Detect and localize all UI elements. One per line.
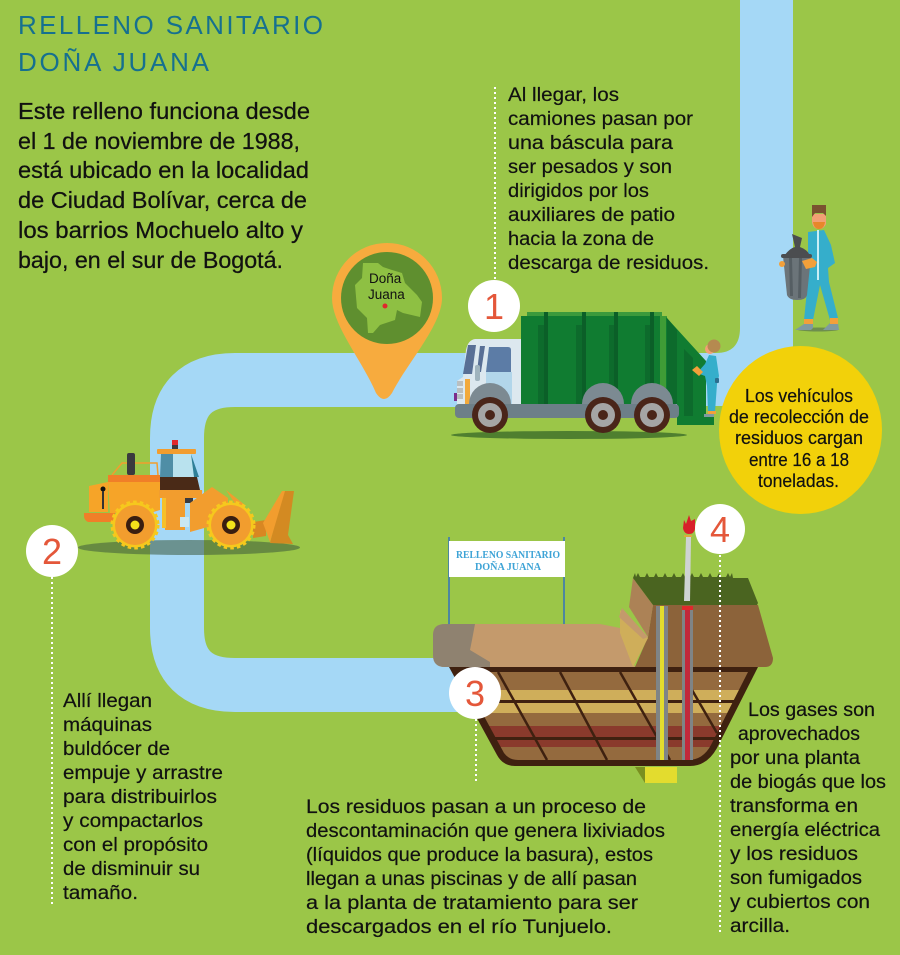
intro text: Este relleno funciona desde (18, 98, 310, 124)
landfill sign: RELLENO SANITARIO (456, 550, 560, 561)
garbage truck (451, 312, 714, 439)
step 4 text (730, 699, 886, 937)
worker with trash can (779, 205, 839, 332)
callout: truck capacity: residuos cargan (735, 427, 863, 448)
bulldozer (78, 440, 300, 555)
step 4 text: de biogás que los (730, 771, 886, 793)
title: DOÑA JUANA (18, 47, 210, 77)
step 3 text: a la planta de tratamiento para ser (306, 892, 639, 914)
step 2 text: máquinas (63, 714, 152, 736)
title (18, 10, 323, 77)
step 3 marker (449, 667, 501, 783)
step 4 text: por una planta (730, 747, 860, 769)
river path (177, 0, 793, 685)
step 3 text: descontaminación que genera lixiviados (306, 820, 665, 842)
truck worker (692, 340, 720, 417)
step 1 text: ser pesados y son (508, 156, 672, 178)
step 2 marker (26, 525, 78, 905)
intro text: está ubicado en la localidad (18, 157, 309, 183)
callout: truck capacity: de recolección de (729, 406, 869, 427)
step 1 text: hacia la zona de (508, 228, 654, 250)
step 1 text: Al llegar, los (508, 84, 619, 106)
step 4 marker (695, 504, 745, 935)
intro text: de Ciudad Bolívar, cerca de (18, 187, 307, 213)
step 4 text: energía eléctrica (730, 819, 880, 841)
step 4 text: aprovechados (738, 723, 860, 745)
step 2 text: tamaño. (63, 882, 138, 904)
step 3 text: descargados en el río Tunjuelo. (306, 916, 612, 938)
intro text: bajo, en el sur de Bogotá. (18, 247, 283, 273)
step 2 text: empuje y arrastre (63, 762, 223, 784)
step 1 marker: 1 (484, 286, 504, 327)
step 1 text: auxiliares de patio (508, 204, 675, 226)
step 4 marker: 4 (710, 509, 730, 550)
step 1 text (508, 84, 709, 274)
step 4 text: Los gases son (748, 699, 875, 721)
step 2 text: Allí llegan (63, 690, 152, 712)
step 3 text: llegan a unas piscinas y de allí pasan (306, 868, 637, 890)
step 2 text: para distribuirlos (63, 786, 217, 808)
map pin: Doña Juana: Doña (369, 271, 402, 286)
step 4 text: y los residuos (730, 843, 858, 865)
step 3 text: Los residuos pasan a un proceso de (306, 796, 646, 818)
step 2 marker: 2 (42, 531, 62, 572)
step 1 text: dirigidos por los (508, 180, 649, 202)
step 2 text: y compactarlos (63, 810, 203, 832)
intro text (18, 98, 310, 273)
landfill sign (448, 537, 565, 625)
step 3 text: (líquidos que produce la basura), estos (306, 844, 653, 866)
landfill cross-section (433, 515, 773, 783)
title: RELLENO SANITARIO (18, 10, 323, 40)
step 3 marker: 3 (465, 673, 485, 714)
step 2 text (63, 690, 223, 904)
callout: truck capacity: Los vehículos (745, 385, 853, 406)
step 4 text: y cubiertos con (730, 891, 870, 913)
step 4 text: transforma en (730, 795, 858, 817)
step 3 text (306, 796, 665, 938)
intro text: el 1 de noviembre de 1988, (18, 128, 300, 154)
map pin: Doña Juana: Juana (368, 287, 405, 302)
step 4 text: arcilla. (730, 915, 790, 937)
step 2 text: con el propósito (63, 834, 208, 856)
step 2 text: buldócer de (63, 738, 170, 760)
landfill sign: DOÑA JUANA (475, 561, 541, 573)
step 4 text: son fumigados (730, 867, 862, 889)
step 1 text: camiones pasan por (508, 108, 694, 130)
callout: truck capacity: entre 16 a 18 (749, 449, 849, 470)
step 1 marker (468, 87, 520, 332)
step 1 text: una báscula para (508, 132, 673, 154)
callout: truck capacity (719, 346, 882, 514)
step 1 text: descarga de residuos. (508, 252, 709, 274)
intro text: los barrios Mochuelo alto y (18, 217, 304, 243)
callout: truck capacity: toneladas. (758, 470, 839, 491)
step 2 text: de disminuir su (63, 858, 200, 880)
map pin: Doña Juana (332, 243, 442, 399)
